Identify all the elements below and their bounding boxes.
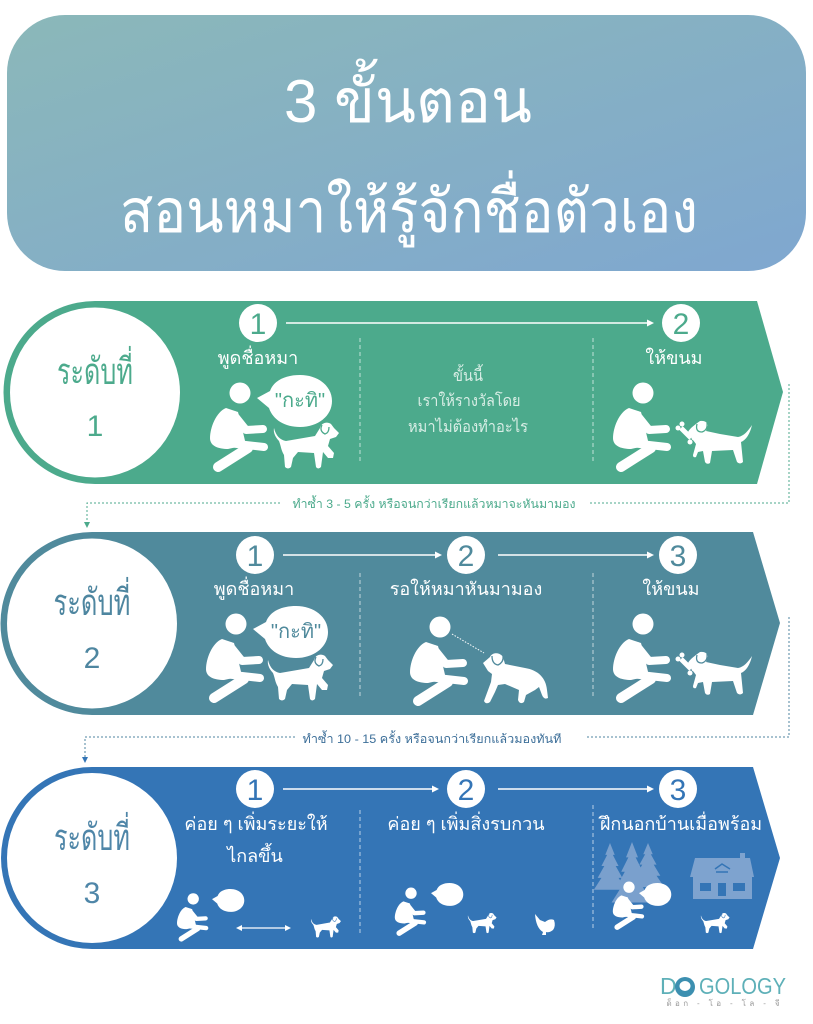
label: train outdoors: ฝึกนอกบ้านเมื่อพร้อม: [598, 811, 762, 834]
step 2 number: 2: [458, 540, 474, 573]
level 1 badge: [10, 308, 180, 478]
connector: level 1 to 2: ทำซ้ำ 3 - 5 ครั้ง หรือจนกว่าเรียกแล้วหมาจะหันมามอง: [292, 495, 576, 511]
label: say the name: พูดชื่อหมา: [218, 345, 298, 369]
label: increase distance: ไกลขึ้น: [225, 843, 283, 866]
icon: dog with chicken distraction: [395, 883, 555, 935]
step 3 number: 3: [670, 540, 686, 573]
icon: house: [690, 853, 754, 899]
label: give treat: ให้ขนม: [642, 578, 700, 599]
logo: GOLOGY: [699, 973, 786, 999]
title banner: [7, 15, 806, 271]
step 3 number: 3: [670, 774, 686, 807]
icon: chicken: [535, 914, 555, 935]
icon: distance between person and dog: [177, 889, 341, 939]
panel: level 3: [1, 767, 780, 949]
title text: [120, 58, 698, 248]
arrow: step 2 to 3: [498, 786, 654, 792]
arrow: step 2 to 3: [498, 552, 654, 558]
label: wait for dog to look: รอให้หมาหันมามอง: [390, 578, 542, 599]
step 2 number: [447, 536, 485, 574]
step 2 number: 2: [458, 774, 474, 807]
level 2 badge: ระดับที่: [54, 576, 130, 623]
connector: level 2 to 3: ทำซ้ำ 10 - 15 ครั้ง หรือจนกว่าเรียกแล้วมองทันที: [302, 730, 562, 746]
panel: level 2: [0, 532, 780, 715]
logo: D: [660, 973, 677, 999]
level 2 badge: 2: [84, 642, 100, 675]
connector: level 1 to 2: [84, 384, 789, 528]
step 1 number: [236, 770, 274, 808]
icon: person giving treat: [613, 382, 752, 467]
level 1 badge: ระดับที่: [57, 345, 133, 392]
middle note: ขั้นนี้: [453, 364, 483, 385]
icon: person calling dog: "กะทิ": [275, 390, 325, 412]
step 1 number: 1: [250, 308, 266, 341]
step 3 number: [659, 770, 697, 808]
middle note: [408, 364, 528, 436]
step 2 number: 2: [673, 308, 689, 341]
connector: level 2 to 3: [82, 617, 789, 763]
icon: person calling dog: "กะทิ": [271, 621, 321, 643]
arrow: step 1 to 2: [283, 552, 442, 558]
level 3 badge: [7, 773, 177, 943]
logo: ด็อก - โอ - โล - จี: [666, 998, 780, 1008]
label: say the name: พูดชื่อหมา: [214, 576, 294, 600]
icon: dog looking at person: [410, 616, 548, 703]
logo: [660, 973, 786, 1008]
icon: outdoor training with trees: [594, 842, 671, 927]
middle note: เราให้รางวัลโดย: [418, 391, 520, 410]
level 3 badge: ระดับที่: [54, 811, 130, 858]
logo mark: [675, 977, 695, 997]
step 1 number: 1: [247, 774, 263, 807]
icon: person calling dog: [210, 375, 339, 468]
step 2 number: [662, 304, 700, 342]
step 3 number: [659, 536, 697, 574]
title text: 3 ขั้นตอน: [284, 58, 532, 135]
step 1 number: [239, 304, 277, 342]
icon: dog: [701, 913, 730, 933]
icon: person calling dog: [206, 606, 333, 700]
label: add distractions: ค่อย ๆ เพิ่มสิ่งรบกวน: [387, 811, 545, 834]
level 3 badge: 3: [84, 877, 100, 910]
middle note: หมาไม่ต้องทำอะไร: [408, 417, 528, 436]
title text: สอนหมาให้รู้จักชื่อตัวเอง: [120, 170, 698, 248]
arrow: step 1 to 2: [283, 786, 439, 792]
icon: person giving treat: [613, 614, 752, 698]
step 1 number: [236, 536, 274, 574]
arrow: step 1 to 2: [286, 320, 654, 326]
step 1 number: 1: [247, 540, 263, 573]
panel: level 1: [3, 301, 783, 484]
level 1 badge: 1: [87, 410, 103, 443]
label: increase distance: [184, 811, 328, 866]
label: increase distance: ค่อย ๆ เพิ่มระยะให้: [184, 811, 328, 834]
label: give treat: ให้ขนม: [645, 347, 703, 368]
level 2 badge: [7, 538, 177, 708]
step 2 number: [447, 770, 485, 808]
